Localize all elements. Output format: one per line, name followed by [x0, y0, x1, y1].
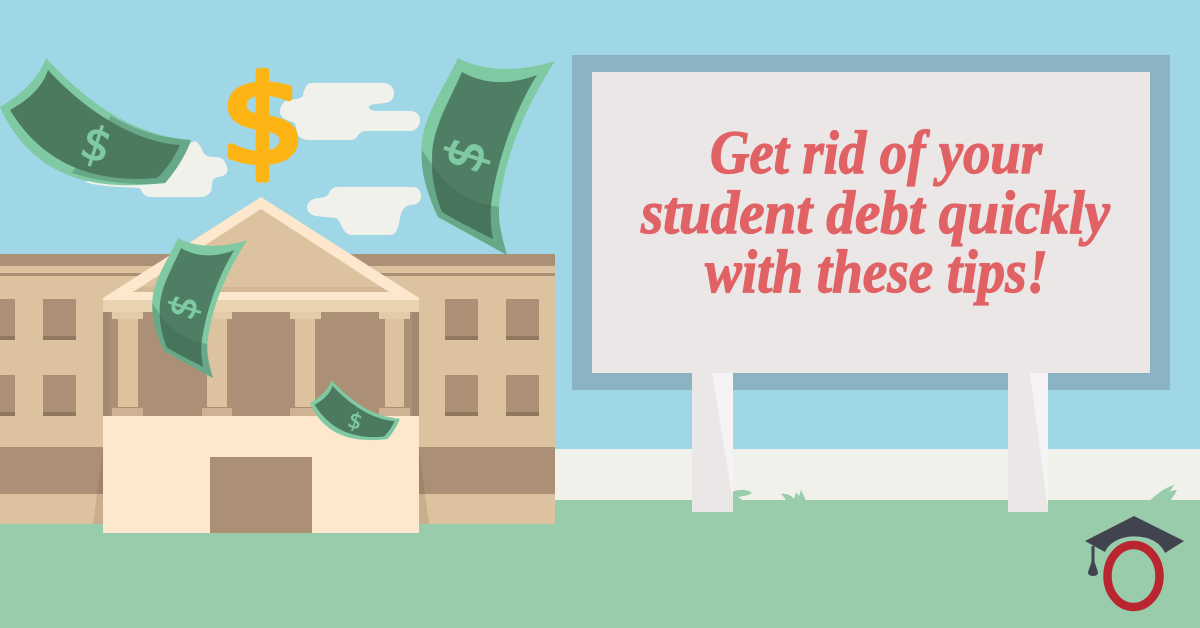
horizon white band: [540, 449, 1200, 501]
money bill top right: [421, 58, 555, 255]
windows: [0, 299, 539, 416]
billboard frame: [572, 55, 1170, 390]
window sills: [0, 336, 539, 416]
headline: student debt quickly: [640, 180, 1111, 247]
billboard: [572, 55, 1170, 512]
billboard panel: [592, 72, 1150, 373]
pediment shadow band: [133, 287, 389, 292]
portico inner wall: [110, 312, 412, 417]
post highlights: [712, 373, 733, 495]
logo graduation cap: [1085, 516, 1184, 553]
ground: [0, 500, 1200, 628]
cornice line: [0, 273, 555, 276]
grass tufts: [732, 485, 1177, 501]
pediment frame: [103, 197, 419, 312]
portico backing: [103, 312, 419, 417]
headline: with these tips!: [705, 239, 1048, 306]
building wing body: [0, 254, 555, 524]
steps shadow: [93, 447, 429, 524]
money bill over portico: $: [159, 289, 208, 325]
cloud top: [280, 83, 420, 140]
columns: [112, 312, 410, 417]
headline: [640, 120, 1111, 306]
money bill small lower: $: [345, 408, 365, 436]
headline: Get rid of your: [710, 120, 1043, 187]
door: [210, 457, 312, 533]
money bill top left: [0, 58, 191, 185]
logo: [1085, 516, 1184, 607]
roof band: [0, 254, 555, 266]
entrance block: [103, 416, 419, 533]
billboard posts: [692, 373, 733, 512]
money bill top right: $: [432, 130, 500, 180]
cloud behind left bill: [85, 141, 228, 197]
money bill top left: $: [74, 114, 119, 174]
money bill over portico: [152, 238, 247, 378]
entablature: [103, 300, 419, 312]
pediment inner triangle: [133, 209, 389, 292]
dark lower band: [0, 447, 555, 494]
logo tassel: [1088, 546, 1098, 576]
logo letter O: [1108, 545, 1160, 607]
money bill small lower: [310, 380, 400, 440]
building: [0, 197, 555, 533]
icon: yellow dollar sign: $: [220, 51, 306, 191]
cloud lower: [307, 187, 421, 235]
